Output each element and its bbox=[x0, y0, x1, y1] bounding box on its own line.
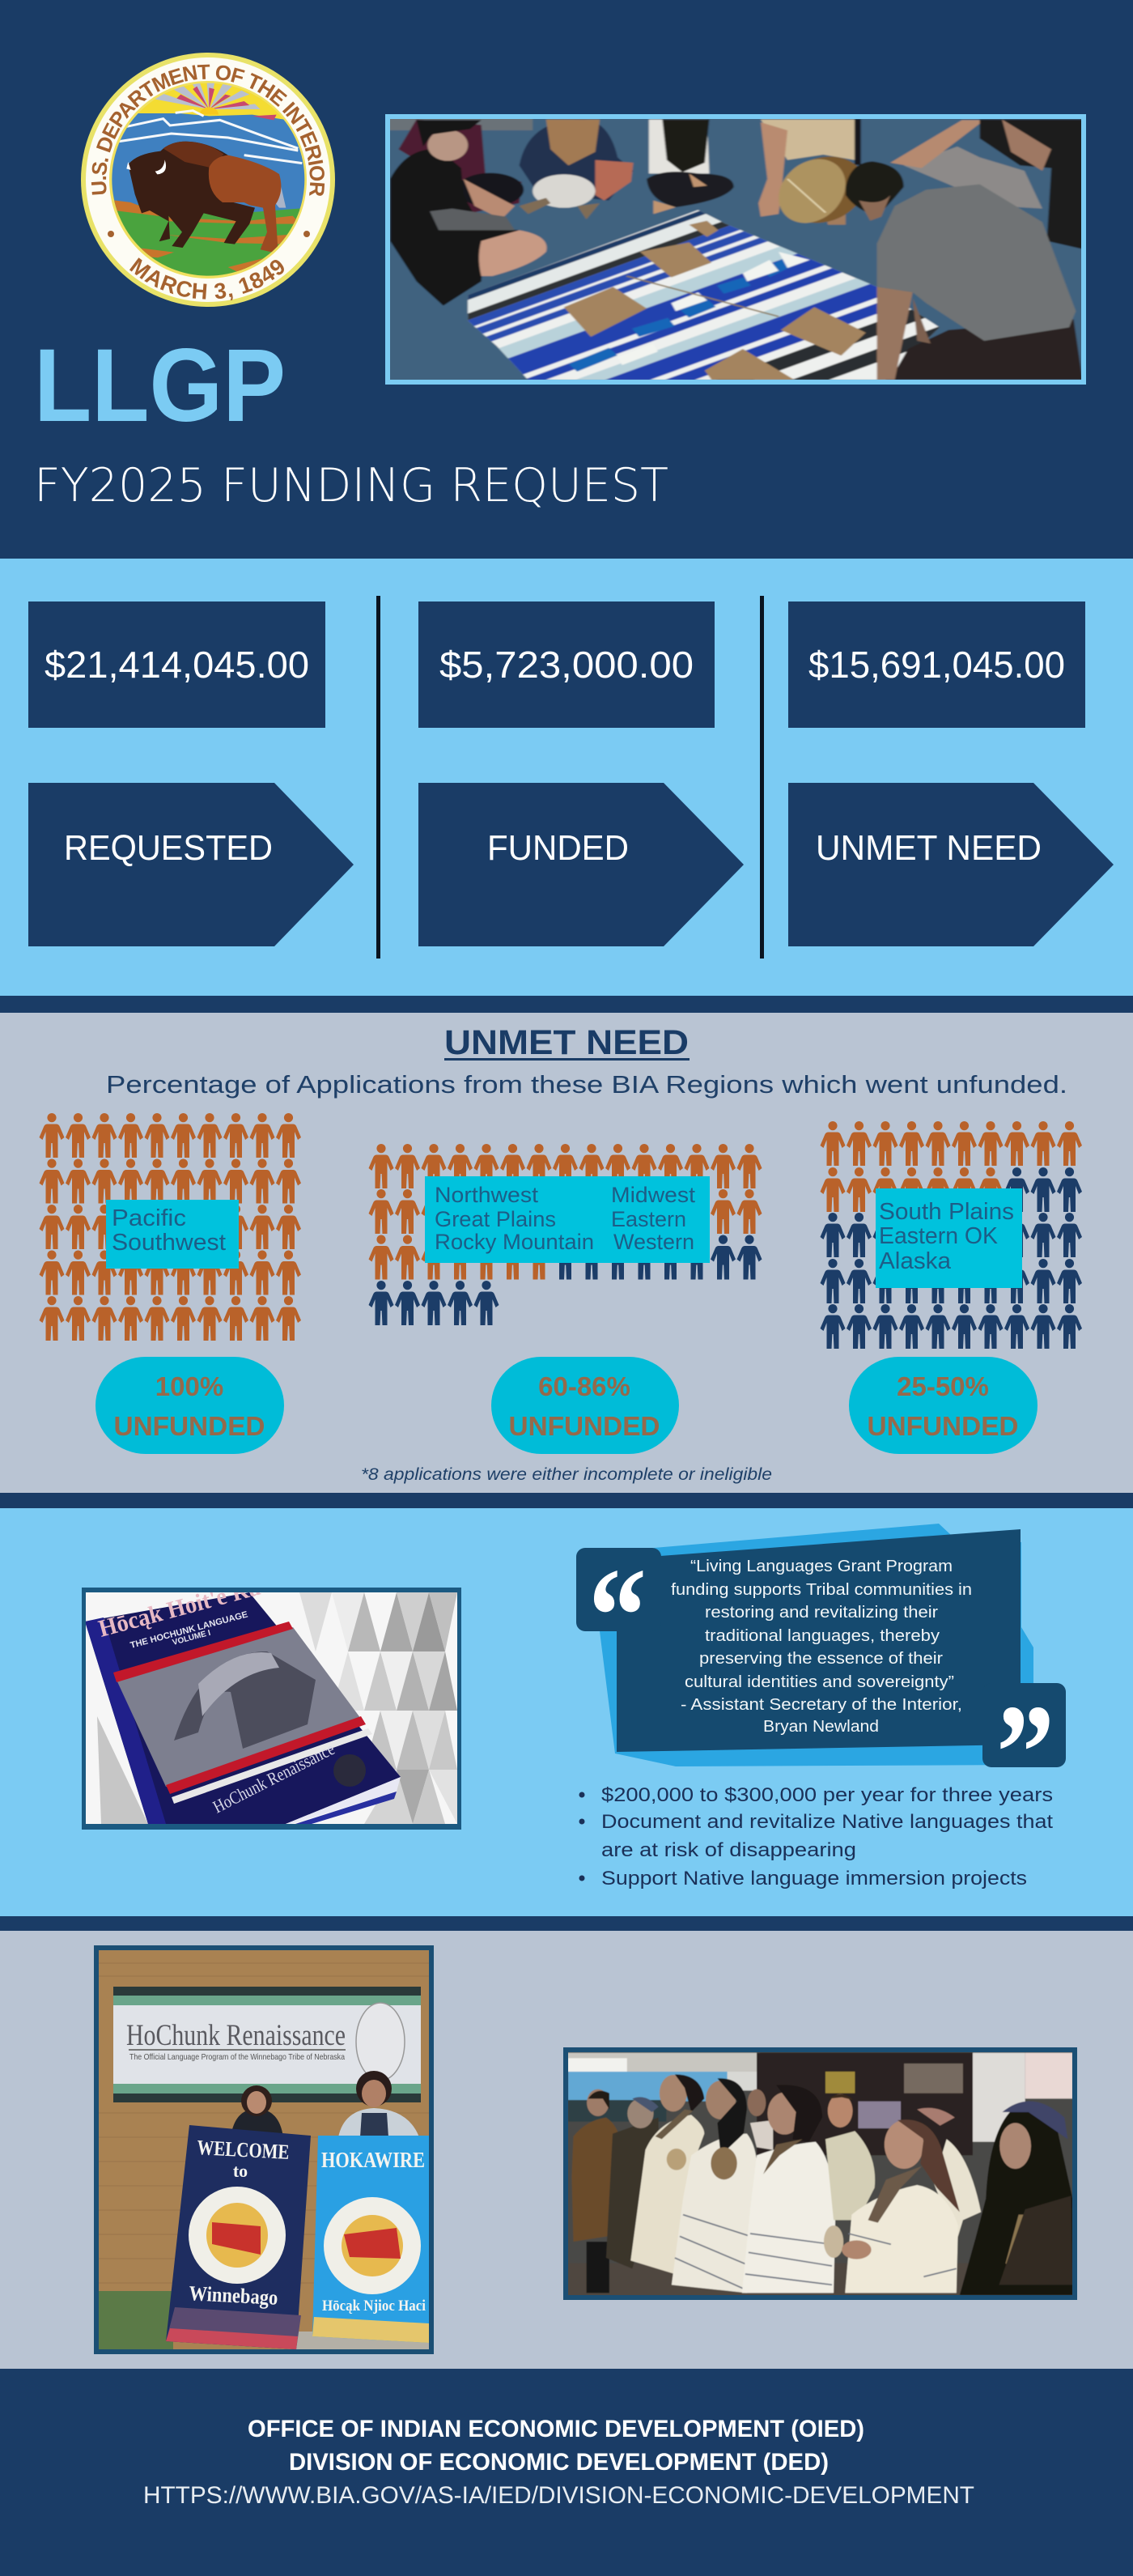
chart: pictogram 25-50% unfunded bbox=[821, 1121, 1082, 1349]
card: requested amount bbox=[28, 601, 325, 728]
person: seated in white skirt bbox=[520, 120, 634, 219]
card: unmet need amount bbox=[788, 601, 1085, 728]
quote text: preserving the essence of their bbox=[699, 1649, 943, 1668]
sign: HoChunk Renaissance bbox=[126, 2019, 346, 2052]
footnote: *8 applications were either incomplete or ineligible bbox=[361, 1465, 772, 1484]
photo: language book bbox=[82, 1574, 461, 1830]
banner: welcome: to bbox=[233, 2161, 248, 2181]
panel: community photos bbox=[0, 1931, 1133, 2369]
person: legs and sandals bbox=[758, 119, 861, 225]
arrow: funded: FUNDED bbox=[487, 828, 629, 868]
list: program facts: $200,000 to $300,000 per year for three years bbox=[601, 1784, 1053, 1806]
label: South Plains, Eastern OK, Alaska: South Plains bbox=[879, 1199, 1014, 1225]
panel: funding summary bbox=[0, 559, 1133, 996]
singer: white robe 1 bbox=[630, 2074, 704, 2274]
list: program facts: Support Native language immersion projects bbox=[601, 1868, 1027, 1889]
book subtitle: THE HOCHUNK LANGUAGE bbox=[129, 1609, 249, 1651]
person: man in gray shirt bbox=[846, 161, 1083, 380]
banner: welcome: WELCOME bbox=[197, 2136, 290, 2164]
man smiling bbox=[825, 2094, 875, 2220]
label: six regions: Western bbox=[613, 1230, 694, 1254]
callout: 60-86% unfunded: 60-86% bbox=[538, 1371, 630, 1401]
label: Pacific, Southwest bbox=[106, 1200, 239, 1269]
banner: welcome: Winnebago bbox=[189, 2281, 278, 2310]
quote text: restoring and revitalizing their bbox=[705, 1603, 938, 1622]
list: program facts: Document and revitalize Native languages that bbox=[601, 1811, 1053, 1833]
quote text: cultural identities and sovereignty” bbox=[685, 1673, 954, 1691]
panel: header background bbox=[0, 0, 1133, 559]
band: navy separator bbox=[0, 1916, 1133, 1931]
callout: 100% unfunded: UNFUNDED bbox=[113, 1411, 265, 1441]
label: Pacific, Southwest: Pacific bbox=[112, 1205, 186, 1231]
label: six regions: Eastern bbox=[611, 1207, 686, 1231]
banner: welcome bbox=[166, 2125, 311, 2349]
book volume: VOLUME I bbox=[172, 1629, 212, 1647]
chart: pictogram 100% unfunded bbox=[39, 1113, 301, 1341]
title: LLGP: LLGP bbox=[34, 328, 286, 444]
callout: 25-50% unfunded bbox=[849, 1357, 1038, 1454]
panel: footer bbox=[0, 2369, 1133, 2576]
card: requested amount: $21,414,045.00 bbox=[45, 644, 309, 686]
quote text: traditional languages, thereby bbox=[705, 1626, 940, 1645]
list: program facts bbox=[579, 1784, 1053, 1889]
icon: hand drum bbox=[770, 151, 876, 228]
label: six regions: Northwest bbox=[435, 1183, 539, 1207]
panel: unmet need bbox=[0, 1013, 1133, 1493]
label: South Plains, Eastern OK, Alaska: Alaska bbox=[879, 1248, 952, 1274]
label: South Plains, Eastern OK, Alaska bbox=[876, 1188, 1022, 1288]
arrow: requested: REQUESTED bbox=[64, 828, 273, 868]
singer behind at right bbox=[917, 2108, 981, 2242]
list: program facts: are at risk of disappearing bbox=[601, 1839, 856, 1861]
quote text: - Assistant Secretary of the Interior, bbox=[681, 1695, 962, 1714]
label: South Plains, Eastern OK, Alaska: Eastern OK bbox=[879, 1223, 999, 1249]
band: navy separator bbox=[0, 996, 1133, 1013]
fur pads bbox=[564, 221, 866, 380]
chart: pictogram 60-86% unfunded bbox=[369, 1144, 762, 1325]
person: woman in black bbox=[390, 120, 546, 306]
panel: program details bbox=[0, 1508, 1133, 1916]
arrow: unmet need bbox=[788, 783, 1114, 946]
icon: Department of the Interior seal: MARCH 3, 1849 bbox=[129, 257, 284, 301]
singer: white robe 3 bbox=[742, 2085, 835, 2293]
label: six regions: Rocky Mountain bbox=[435, 1230, 594, 1254]
quote text: funding supports Tribal communities in bbox=[671, 1580, 972, 1599]
card: funded amount: $5,723,000.00 bbox=[439, 644, 694, 686]
footer: office name: OFFICE OF INDIAN ECONOMIC DEVELOPMENT (OIED) bbox=[248, 2416, 864, 2442]
card: funded amount bbox=[418, 601, 715, 728]
person: plaid and dark clothes at right bbox=[890, 120, 1083, 249]
icon: Department of the Interior seal: U.S. DEPARTMENT OF THE INTERIOR bbox=[91, 65, 325, 196]
man in back bbox=[748, 2089, 773, 2150]
quote mark closing: ” bbox=[996, 1677, 1054, 1829]
sign bbox=[113, 1987, 421, 2102]
quote card bbox=[576, 1524, 1066, 1829]
label: six regions: Midwest bbox=[611, 1183, 696, 1207]
callout: 60-86% unfunded: UNFUNDED bbox=[508, 1411, 660, 1441]
callout: 100% unfunded: 100% bbox=[155, 1371, 223, 1401]
callout: 100% unfunded bbox=[95, 1357, 284, 1454]
divider: right bbox=[760, 596, 764, 959]
people behind banners bbox=[231, 2071, 419, 2137]
photo: language speakers singing bbox=[563, 2047, 1077, 2300]
label: Pacific, Southwest: Southwest bbox=[112, 1230, 226, 1256]
subtitle: FY2025 funding request: FY2025 FUNDING REQUEST bbox=[34, 459, 668, 512]
stick bbox=[626, 276, 779, 317]
quote text bbox=[671, 1557, 972, 1736]
heading: unmet need: UNMET NEED bbox=[444, 1023, 689, 1062]
person: long dark hair, white shirt bbox=[647, 120, 734, 214]
label: six regions: Great Plains bbox=[435, 1207, 556, 1231]
callout: 25-50% unfunded: 25-50% bbox=[897, 1371, 989, 1401]
singer: white robe 4 bbox=[824, 2119, 960, 2293]
blanket bbox=[466, 209, 940, 380]
band: navy separator bbox=[0, 1493, 1133, 1508]
book title: Hōcąk Hoit'e Ra bbox=[95, 1574, 263, 1643]
callout: 25-50% unfunded: UNFUNDED bbox=[868, 1411, 1018, 1441]
singer: dark parka bbox=[606, 2097, 659, 2268]
card: unmet need amount: $15,691,045.00 bbox=[808, 644, 1065, 686]
quote mark opening: “ bbox=[588, 1540, 647, 1692]
footer: web address: HTTPS://WWW.BIA.GOV/AS-IA/IED/DIVISION-ECONOMIC-DEVELOPMENT bbox=[143, 2482, 974, 2509]
singer: white robe 2 bbox=[672, 2078, 757, 2293]
singer: dark parka and patterned hat bbox=[960, 2102, 1072, 2295]
banner: Hokawire bbox=[312, 2136, 430, 2343]
sign: The Official Language Program of the Winnebago Tribe of Nebraska bbox=[129, 2052, 345, 2062]
icon: Department of the Interior seal bbox=[81, 53, 335, 307]
photo: group seated around blanket bbox=[385, 114, 1086, 385]
footer: division name: DIVISION OF ECONOMIC DEVELOPMENT (DED) bbox=[289, 2449, 829, 2476]
quote text: Bryan Newland bbox=[763, 1717, 879, 1736]
arrow: requested bbox=[28, 783, 354, 946]
subheading: Percentage of Applications from these BIA Regions which went unfunded. bbox=[106, 1070, 1067, 1099]
callout: 60-86% unfunded bbox=[491, 1357, 679, 1454]
arrow: unmet need: UNMET NEED bbox=[816, 828, 1042, 868]
book publisher: HoChunk Renaissance bbox=[210, 1738, 337, 1817]
quote text: “Living Languages Grant Program bbox=[690, 1557, 953, 1575]
label: six regions bbox=[425, 1176, 710, 1263]
arrow: funded bbox=[418, 783, 744, 946]
photo: HoChunk Renaissance banners bbox=[94, 1945, 434, 2354]
singer: brown parka bbox=[571, 2089, 621, 2293]
divider: left bbox=[376, 596, 380, 959]
